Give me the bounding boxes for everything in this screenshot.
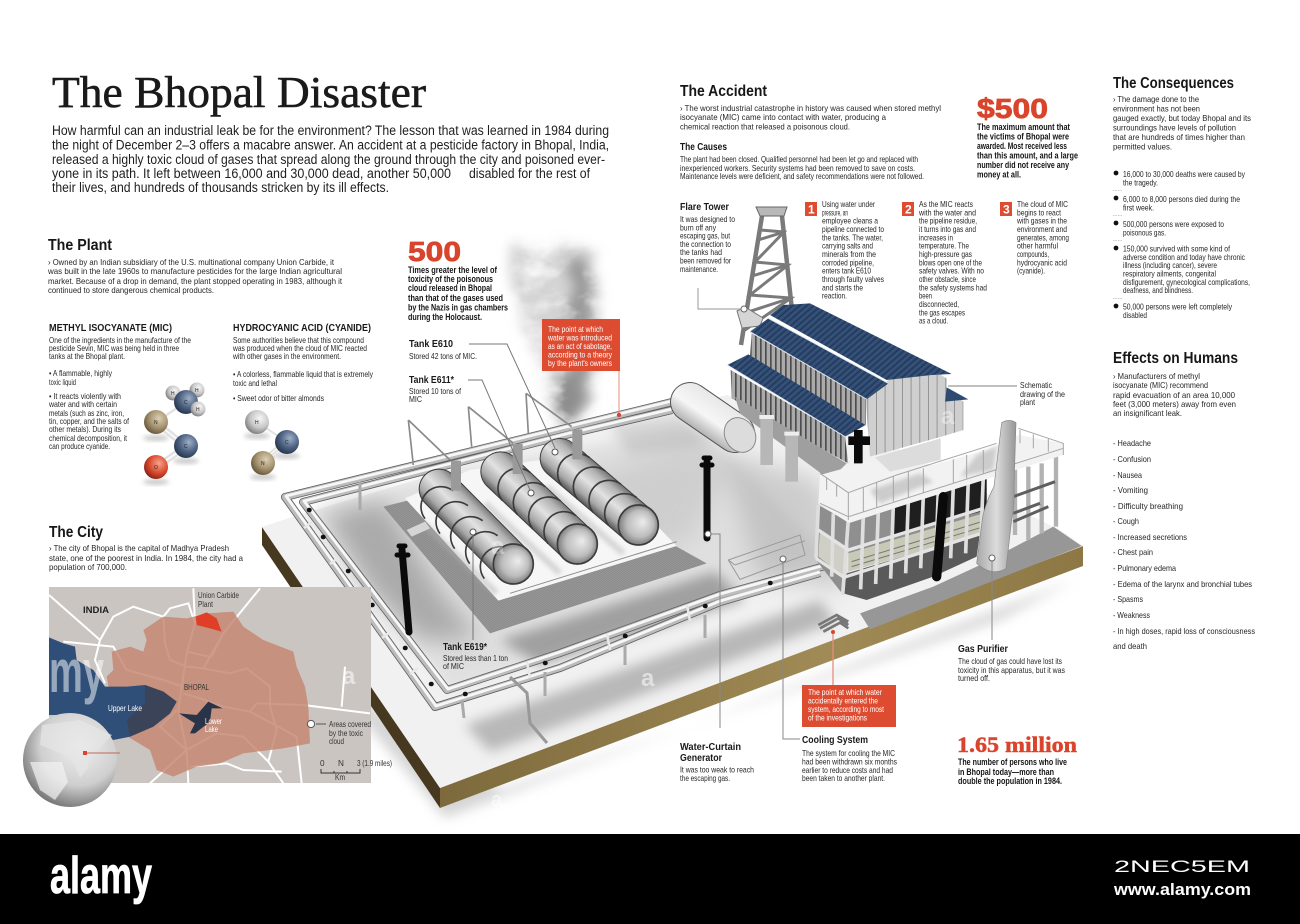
map labels bbox=[83, 591, 392, 782]
panel: the city bbox=[49, 524, 243, 572]
image id and site bbox=[1113, 858, 1251, 899]
label: schematic drawing: Schematic bbox=[1020, 380, 1053, 390]
callout: accidental water entry: of the investigations bbox=[808, 712, 867, 722]
label: flare tower: been removed for bbox=[680, 256, 731, 266]
intro paragraph: released a highly toxic cloud of gases that spread along the ground through the city and poisoned ever- bbox=[52, 152, 605, 167]
step 3: begins to react bbox=[1017, 207, 1061, 217]
label: tank E611: Tank E611* bbox=[409, 375, 454, 386]
symptoms list: - Weakness bbox=[1113, 610, 1150, 620]
label: flare tower: maintenance. bbox=[680, 264, 718, 274]
label: cooling system: The system for cooling the MIC bbox=[802, 748, 895, 758]
tank vents and braces bbox=[408, 393, 577, 491]
panel: the plant: The Plant bbox=[48, 237, 112, 254]
water inlet pipes bbox=[818, 615, 848, 632]
panel: hydrocyanic acid text: • Sweet odor of bitter almonds bbox=[233, 393, 324, 403]
label: gas purifier: The cloud of gas could have lost its bbox=[958, 656, 1062, 666]
step 1: and starts the bbox=[822, 282, 863, 292]
icon: cyanide molecule: C bbox=[285, 440, 289, 446]
concrete tank base and tanks bbox=[383, 393, 707, 633]
consequences bullet list: the tragedy. bbox=[1123, 178, 1158, 188]
stat: 1.65 million: 1.65 million bbox=[957, 732, 1077, 757]
icon: MIC molecule: C bbox=[184, 444, 188, 450]
plant illustration bbox=[262, 207, 1083, 818]
step 2: as a cloud. bbox=[919, 316, 948, 326]
callout: sabotage: by the plant's owners bbox=[548, 358, 612, 368]
panel: effects on humans bbox=[1113, 350, 1255, 651]
title: The Bhopal Disaster bbox=[52, 68, 426, 117]
stock watermarks: a bbox=[941, 403, 955, 430]
pipe network bbox=[285, 401, 825, 743]
icon: MIC molecule: C bbox=[184, 400, 188, 406]
tank E611 row bbox=[498, 468, 597, 564]
map labels: Km bbox=[335, 773, 345, 782]
panel: the consequences bbox=[1113, 75, 1251, 320]
stock watermarks: a bbox=[641, 665, 655, 692]
step 1 bbox=[805, 199, 884, 301]
scrubber: left face bbox=[816, 505, 848, 595]
label: tank E610 bbox=[409, 339, 558, 455]
panel: the city: The City bbox=[49, 524, 103, 541]
stat: 1.65 million: double the population in 1984. bbox=[958, 776, 1062, 786]
scrubber: pipe band bbox=[848, 513, 983, 572]
step 2: it turns into gas and bbox=[919, 224, 976, 234]
label: cooling system: Cooling System bbox=[802, 735, 868, 746]
consequences bullet list: 6,000 to 8,000 persons died during the bbox=[1123, 194, 1240, 204]
panel: the accident: › The worst industrial catastrophe in history was caused when stored methyl bbox=[680, 103, 941, 113]
building: lower wall bbox=[731, 370, 848, 463]
panel: the city: › The city of Bhopal is the capital of Madhya Pradesh bbox=[49, 543, 229, 553]
icon: MIC molecule: H bbox=[195, 388, 199, 394]
building: small side roof bbox=[945, 387, 968, 402]
label: tank E619: Tank E619* bbox=[443, 642, 487, 653]
symptoms list: - Headache bbox=[1113, 438, 1151, 448]
consequences bullet list: disfigurement, gynecological complications, bbox=[1123, 277, 1250, 287]
scrubber: right frame bbox=[1013, 457, 1056, 540]
consequences bullet list: 50,000 persons were left completely bbox=[1123, 302, 1233, 312]
stat: 500 times toxicity: 500 bbox=[408, 236, 461, 267]
stat: $500: money at all. bbox=[977, 170, 1021, 180]
stat: $500: awarded. Most received less bbox=[977, 141, 1067, 151]
label: flare tower: It was designed to bbox=[680, 214, 735, 224]
panel: the accident bbox=[680, 83, 941, 132]
step 2: As the MIC reacts bbox=[919, 199, 973, 209]
smoke cloud bbox=[510, 240, 600, 428]
toxic cloud area bbox=[107, 612, 310, 777]
consequences bullet list: illness (including cancer), severe bbox=[1123, 260, 1217, 270]
consequences bullet list: poisonous gas. bbox=[1123, 228, 1166, 238]
panel: the consequences: surroundings have levels of pollution bbox=[1113, 122, 1236, 132]
label: schematic drawing bbox=[948, 380, 1065, 407]
label: flare tower bbox=[680, 202, 747, 312]
consequences bullet list: respiratory ailments, congenital bbox=[1123, 268, 1216, 278]
panel: effects on humans: rapid evacuation of an area 10,000 bbox=[1113, 390, 1235, 400]
map labels: Areas covered bbox=[329, 720, 371, 729]
label: tank E611: Stored 10 tons of bbox=[409, 386, 462, 396]
panel: methyl isocyanate text: • A flammable, highly bbox=[49, 368, 113, 378]
intro paragraph bbox=[52, 123, 609, 195]
map labels: Union Carbide bbox=[198, 591, 239, 600]
step 3: 3 bbox=[1003, 202, 1010, 216]
flare tower bbox=[737, 207, 793, 345]
consequences bullet list: 500,000 persons were exposed to bbox=[1123, 219, 1224, 229]
panel: hydrocyanic acid text: HYDROCYANIC ACID (CYANIDE) bbox=[233, 323, 371, 334]
icon: MIC molecule bbox=[143, 382, 206, 485]
symptoms list: - Cough bbox=[1113, 516, 1139, 526]
scrubber: columns and beams bbox=[816, 475, 983, 595]
label: water-curtain generator: Water-Curtain bbox=[680, 742, 741, 753]
step 3: generates, among bbox=[1017, 232, 1069, 242]
stock watermarks: a bbox=[491, 533, 505, 560]
building: lower roof bbox=[727, 354, 866, 437]
panel: the causes: The plant had been closed. Qualified personnel had been let go and replaced with bbox=[680, 154, 918, 164]
step 3 bbox=[1000, 199, 1069, 276]
panel: methyl isocyanate text: • It reacts violently with bbox=[49, 391, 121, 401]
label: tank E619 bbox=[443, 529, 508, 671]
intro paragraph: the night of December 2–3 offers a macabre answer. An accident at a pesticide factory in Bhopal, India, bbox=[52, 138, 609, 152]
symptoms list: - Confusion bbox=[1113, 454, 1151, 464]
panel: the causes: The Causes bbox=[680, 141, 727, 153]
black footer band bbox=[0, 834, 1300, 924]
consequences bullet list: first week. bbox=[1123, 202, 1154, 212]
map labels: Lake bbox=[205, 724, 218, 734]
stat: $500: number did not receive any bbox=[977, 160, 1069, 170]
label: tank E610: Tank E610 bbox=[409, 339, 453, 350]
panel: methyl isocyanate text: tin, copper, and the salts of bbox=[49, 416, 130, 426]
symptoms list: - In high doses, rapid loss of consciousness bbox=[1113, 626, 1255, 636]
symptoms list: - Nausea bbox=[1113, 470, 1142, 480]
step 1: reaction. bbox=[822, 291, 847, 301]
stat: $500 bbox=[977, 93, 1078, 180]
label: gas purifier: Gas Purifier bbox=[958, 644, 1008, 655]
map roads bbox=[49, 588, 370, 783]
map labels: 0 bbox=[320, 759, 325, 768]
step 2: the safety systems had bbox=[919, 282, 987, 292]
icon: cyanide molecule: H bbox=[255, 420, 259, 426]
step 2: safety valves. With no bbox=[919, 266, 984, 276]
board shadow bbox=[330, 580, 1075, 818]
panel: methyl isocyanate text: chemical decomposition, it bbox=[49, 433, 127, 443]
symptoms list: and death bbox=[1113, 641, 1147, 651]
panel: the plant: continued to store dangerous chemical products. bbox=[48, 285, 214, 295]
panel: hydrocyanic acid text: Some authorities believe that this compound bbox=[233, 335, 364, 345]
process building and scrubber structure bbox=[727, 303, 1082, 632]
map labels: 3 (1.9 miles) bbox=[357, 759, 392, 768]
intake cylinders bbox=[767, 415, 792, 482]
tank E619 row bbox=[421, 487, 533, 584]
scrubber: deck bbox=[818, 435, 1063, 523]
callout: sabotage: The point at which bbox=[548, 324, 603, 334]
step 1: minerals from the bbox=[822, 249, 876, 259]
callout: accidental water entry: accidentally entered the bbox=[808, 696, 878, 706]
panel: the consequences: permitted values. bbox=[1113, 142, 1172, 152]
step 1: Using water under bbox=[822, 199, 875, 209]
scrubber: front upper cells bbox=[848, 478, 987, 553]
symptoms list: - Chest pain bbox=[1113, 547, 1153, 557]
stat: $500: the victims of Bhopal were bbox=[977, 132, 1069, 142]
scrubber: railings bbox=[820, 428, 1063, 520]
intro paragraph: their lives, and hundreds of thousands stricken by its ill effects. bbox=[52, 180, 389, 195]
label: schematic drawing: plant bbox=[1020, 397, 1036, 407]
panel: the accident: chemical reaction that released a poisonous cloud. bbox=[680, 122, 850, 132]
intro paragraph: disabled for the rest of bbox=[469, 166, 590, 181]
intro paragraph: yone in its path. It left between 16,000 and 30,000 dead, another 50,000 bbox=[52, 166, 451, 181]
callout: sabotage: according to a theory bbox=[548, 350, 613, 360]
icon: MIC molecule: H bbox=[171, 391, 175, 397]
panel: effects on humans: isocyanate (MIC) recommend bbox=[1113, 380, 1208, 390]
globe inset bbox=[23, 713, 120, 807]
panel: effects on humans: an insignificant leak. bbox=[1113, 408, 1182, 418]
label: cooling system: had been withdrawn six months bbox=[802, 756, 897, 766]
map labels: Plant bbox=[198, 600, 214, 609]
symptoms list: - Pulmonary edema bbox=[1113, 563, 1176, 573]
panel: the plant: market. Because of a drop in demand, the plant stopped operating in 1983, although it bbox=[48, 276, 343, 286]
step 3: compounds, bbox=[1017, 249, 1049, 259]
step 3: other harmful bbox=[1017, 241, 1058, 251]
label: flare tower: escaping gas, but bbox=[680, 230, 730, 240]
panel: the consequences: environment has not been bbox=[1113, 104, 1200, 114]
label: tank E619: Stored less than 1 ton bbox=[443, 653, 508, 663]
label: flare tower: the connection to bbox=[680, 239, 731, 249]
step 2: other obstacle, since bbox=[919, 274, 976, 284]
stat: 500 times toxicity: during the Holocaust. bbox=[408, 312, 482, 322]
panel: the causes: Maintenance levels were deficient, and safety recommendations were not followed. bbox=[680, 171, 924, 181]
panel: methyl isocyanate text: toxic liquid bbox=[49, 377, 76, 387]
building: ground storey bbox=[735, 397, 847, 480]
step 3: (cyanide). bbox=[1017, 266, 1045, 276]
panel: methyl isocyanate text: other metals). During its bbox=[49, 424, 121, 434]
step 2: increases in bbox=[919, 232, 953, 242]
icon: cyanide molecule bbox=[244, 410, 300, 480]
label: cooling system bbox=[780, 556, 897, 783]
symptoms list: - Increased secretions bbox=[1113, 532, 1187, 542]
panel: the accident: isocyanate (MIC) came into contact with water, producing a bbox=[680, 112, 886, 122]
panel: hydrocyanic acid text: • A colorless, flammable liquid that is extremely bbox=[233, 369, 374, 379]
stat: 500 times toxicity: toxicity of the poisonous bbox=[408, 274, 493, 284]
right ground band bbox=[860, 527, 1082, 629]
panel: effects on humans: feet (3,000 meters) away from even bbox=[1113, 399, 1236, 409]
panel: the consequences: gauged exactly, but today Bhopal and its bbox=[1113, 113, 1251, 123]
step 1: enters tank E610 bbox=[822, 266, 871, 276]
panel: the causes: inexperienced workers. Security systems had been removed to save on costs. bbox=[680, 163, 915, 173]
panel: methyl isocyanate text: One of the ingredients in the manufacture of the bbox=[49, 335, 191, 345]
panel: hydrocyanic acid text: with other gases in the environment. bbox=[232, 351, 341, 361]
callout: accidental water entry: system, according to most bbox=[808, 704, 885, 714]
label: tank E611: MIC bbox=[409, 394, 422, 404]
map labels: BHOPAL bbox=[184, 683, 209, 692]
panel: the plant bbox=[47, 237, 343, 295]
panel: the city: population of 700,000. bbox=[49, 562, 127, 572]
label: water-curtain generator: the escaping gas. bbox=[680, 773, 730, 783]
consequences bullet list bbox=[1113, 169, 1250, 320]
step 1: pipeline connected to bbox=[822, 224, 884, 234]
panel: the consequences: The Consequences bbox=[1113, 75, 1234, 92]
callout: sabotage bbox=[542, 319, 621, 417]
water curtain box bbox=[728, 535, 805, 579]
panel: the plant: › Owned by an Indian subsidiary of the U.S. multinational company Union Carbide, it bbox=[48, 257, 335, 267]
wooden board edge bbox=[262, 527, 1083, 808]
label: tank E610: Stored 42 tons of MIC. bbox=[409, 351, 477, 361]
callout: sabotage: water was introduced bbox=[547, 332, 612, 342]
step 2: disconnected, bbox=[919, 299, 959, 309]
panel: hydrocyanic acid text: toxic and lethal bbox=[233, 378, 277, 388]
panel: the city: state, one of the poorest in India. In 1984, the city had a bbox=[49, 553, 243, 563]
panel: methyl isocyanate text: pesticide Sevin, MIC was being held in three bbox=[49, 343, 179, 353]
step 1: 1 bbox=[808, 202, 815, 216]
step 3: hydrocyanic acid bbox=[1017, 257, 1067, 267]
panel: methyl isocyanate text: water and with certain bbox=[48, 399, 117, 409]
black gas stacks bbox=[397, 458, 712, 632]
label: water-curtain generator: It was too weak to reach bbox=[680, 764, 754, 774]
step 1: pressure, an bbox=[822, 207, 848, 217]
consequences bullet list: deafness, and blindness. bbox=[1123, 285, 1193, 295]
step 1: corroded pipeline, bbox=[822, 257, 874, 267]
horizontal storage tank bbox=[690, 402, 762, 458]
map labels: cloud bbox=[329, 737, 344, 746]
step 2: with the water and bbox=[918, 207, 976, 217]
stock watermarks: a bbox=[342, 663, 356, 690]
panel: the consequences: that are hundreds of times higher than bbox=[1113, 132, 1245, 142]
base slopes bbox=[383, 457, 707, 633]
panel: effects on humans: › Manufacturers of methyl bbox=[1113, 371, 1200, 381]
panel: effects on humans: Effects on Humans bbox=[1113, 350, 1238, 367]
panel: methyl isocyanate text: metals (such as zinc, iron, bbox=[49, 408, 124, 418]
building: side lower storey bbox=[875, 438, 941, 472]
stat: $500: The maximum amount that bbox=[977, 122, 1070, 132]
icon: MIC molecule: N bbox=[154, 420, 158, 426]
stock watermarks bbox=[49, 403, 955, 811]
panel: the consequences: › The damage done to the bbox=[1113, 94, 1199, 104]
symptoms list: - Difficulty breathing bbox=[1113, 501, 1183, 511]
tank E610 row bbox=[558, 454, 658, 545]
symptoms list: - Vomiting bbox=[1113, 485, 1148, 495]
stat: 1.65 million: The number of persons who live bbox=[958, 757, 1067, 767]
base top bbox=[405, 453, 677, 601]
stat: 500 times toxicity bbox=[408, 236, 508, 322]
stat: $500: than this amount, and a large bbox=[977, 150, 1078, 160]
step 2 bbox=[902, 199, 987, 326]
label: tank E619: of MIC bbox=[443, 661, 464, 671]
consequences bullet list: adverse condition and today have chronic bbox=[1123, 252, 1246, 262]
step 1: employee cleans a bbox=[822, 216, 878, 226]
image id and site: www.alamy.com bbox=[1113, 881, 1251, 899]
step 1: the tanks. The water, bbox=[822, 232, 883, 242]
panel: hydrocyanic acid text bbox=[232, 323, 374, 403]
symptoms list: - Edema of the larynx and bronchial tubes bbox=[1113, 579, 1252, 589]
building: middle roof bbox=[750, 318, 888, 399]
label: cooling system: been taken to another plant. bbox=[802, 773, 885, 783]
stat: $500: $500 bbox=[977, 93, 1048, 124]
ground shadows bbox=[310, 415, 850, 752]
label: water-curtain generator: Generator bbox=[680, 753, 722, 764]
step 3: with gases in the bbox=[1016, 216, 1067, 226]
label: flare tower: the tanks had bbox=[680, 247, 722, 257]
consequences bullet list: 16,000 to 30,000 deaths were caused by bbox=[1123, 169, 1246, 179]
panel: methyl isocyanate text bbox=[48, 323, 191, 451]
stat: 1.65 million bbox=[957, 732, 1077, 786]
board surface bbox=[262, 395, 1083, 788]
stat: 500 times toxicity: by the Nazis in gas chambers bbox=[408, 302, 508, 312]
map labels: INDIA bbox=[83, 605, 109, 616]
panel: hydrocyanic acid text: was produced when the cloud of MIC reacted bbox=[232, 343, 367, 353]
building: top roof bbox=[770, 303, 952, 380]
panel: the plant: was built in the late 1960s to manufacture pesticides for the large Indian agricultural bbox=[47, 266, 342, 276]
union carbide plant bbox=[196, 612, 222, 632]
step 1: carrying salts and bbox=[822, 241, 873, 251]
stock watermarks: my bbox=[49, 638, 104, 705]
scrubber: ground shadow bbox=[843, 533, 980, 600]
step 2: blows open one of the bbox=[919, 257, 982, 267]
symptoms list bbox=[1113, 438, 1255, 651]
icon: cyanide molecule: N bbox=[261, 461, 265, 467]
map labels: by the toxic bbox=[329, 729, 363, 738]
panel: the accident: The Accident bbox=[680, 83, 767, 100]
label: tank E611 bbox=[409, 375, 534, 496]
callout: accidental water entry: The point at which water bbox=[808, 687, 882, 697]
lakes bbox=[49, 637, 177, 740]
map of Bhopal bbox=[49, 587, 392, 783]
label: gas purifier: turned off. bbox=[958, 673, 990, 683]
label: cooling system: earlier to reduce costs and had bbox=[802, 765, 893, 775]
map labels: N bbox=[338, 759, 344, 768]
panel: methyl isocyanate text: tanks at the Bhopal plant. bbox=[49, 351, 125, 361]
black stack on building bbox=[848, 430, 870, 463]
stat: 500 times toxicity: than that of the gases used bbox=[408, 293, 503, 303]
alamy logo: alamy bbox=[50, 847, 152, 905]
step 2: been bbox=[919, 291, 932, 301]
intro paragraph: How harmful can an industrial leak be for the environment? The lesson that was learned in 1984 during bbox=[52, 123, 609, 138]
building: gable wall bbox=[866, 368, 963, 457]
bottle-shaped gas purifier bbox=[977, 420, 1016, 572]
stock watermarks: a bbox=[491, 789, 503, 811]
label: gas purifier bbox=[958, 555, 1065, 683]
label: water-curtain generator bbox=[680, 531, 754, 783]
stat: 500 times toxicity: cloud released in Bhopal bbox=[408, 283, 492, 293]
step 3: The cloud of MIC bbox=[1017, 199, 1068, 209]
map labels: Upper Lake bbox=[108, 703, 142, 713]
callout: sabotage: as an act of sabotage, bbox=[548, 341, 612, 351]
building: upper wall bbox=[750, 333, 866, 425]
label: flare tower: burn off any bbox=[680, 222, 717, 232]
step 2: the gas escapes bbox=[919, 307, 965, 317]
consequences bullet list: disabled bbox=[1123, 310, 1147, 320]
step 2: high-pressure gas bbox=[919, 249, 972, 259]
step 3: environment and bbox=[1017, 224, 1067, 234]
symptoms list: - Spasms bbox=[1113, 594, 1143, 604]
panel: the causes bbox=[680, 141, 924, 181]
black pipe on scrubber bbox=[937, 497, 943, 577]
consequences bullet list: 150,000 survived with some kind of bbox=[1123, 244, 1231, 254]
stat: 1.65 million: in Bhopal today—more than bbox=[958, 767, 1054, 777]
icon: MIC molecule: O bbox=[154, 465, 158, 471]
panel: methyl isocyanate text: can produce cyanide. bbox=[49, 441, 110, 451]
label: schematic drawing: drawing of the bbox=[1020, 389, 1065, 399]
image id and site: 2NEC5EM bbox=[1114, 858, 1250, 876]
step 2: 2 bbox=[905, 202, 912, 216]
label: flare tower: Flare Tower bbox=[680, 202, 729, 213]
step 2: the pipeline residue, bbox=[919, 216, 977, 226]
icon: MIC molecule: H bbox=[196, 407, 200, 413]
callout: accidental water entry bbox=[802, 630, 896, 727]
step 1: through faulty valves bbox=[822, 274, 884, 284]
step 2: temperature. The bbox=[919, 241, 969, 251]
map labels: Lower bbox=[205, 716, 222, 726]
label: gas purifier: toxicity in this apparatus, but it was bbox=[958, 665, 1065, 675]
panel: methyl isocyanate text: METHYL ISOCYANATE (MIC) bbox=[49, 323, 172, 334]
stat: 500 times toxicity: Times greater the level of bbox=[408, 265, 497, 275]
